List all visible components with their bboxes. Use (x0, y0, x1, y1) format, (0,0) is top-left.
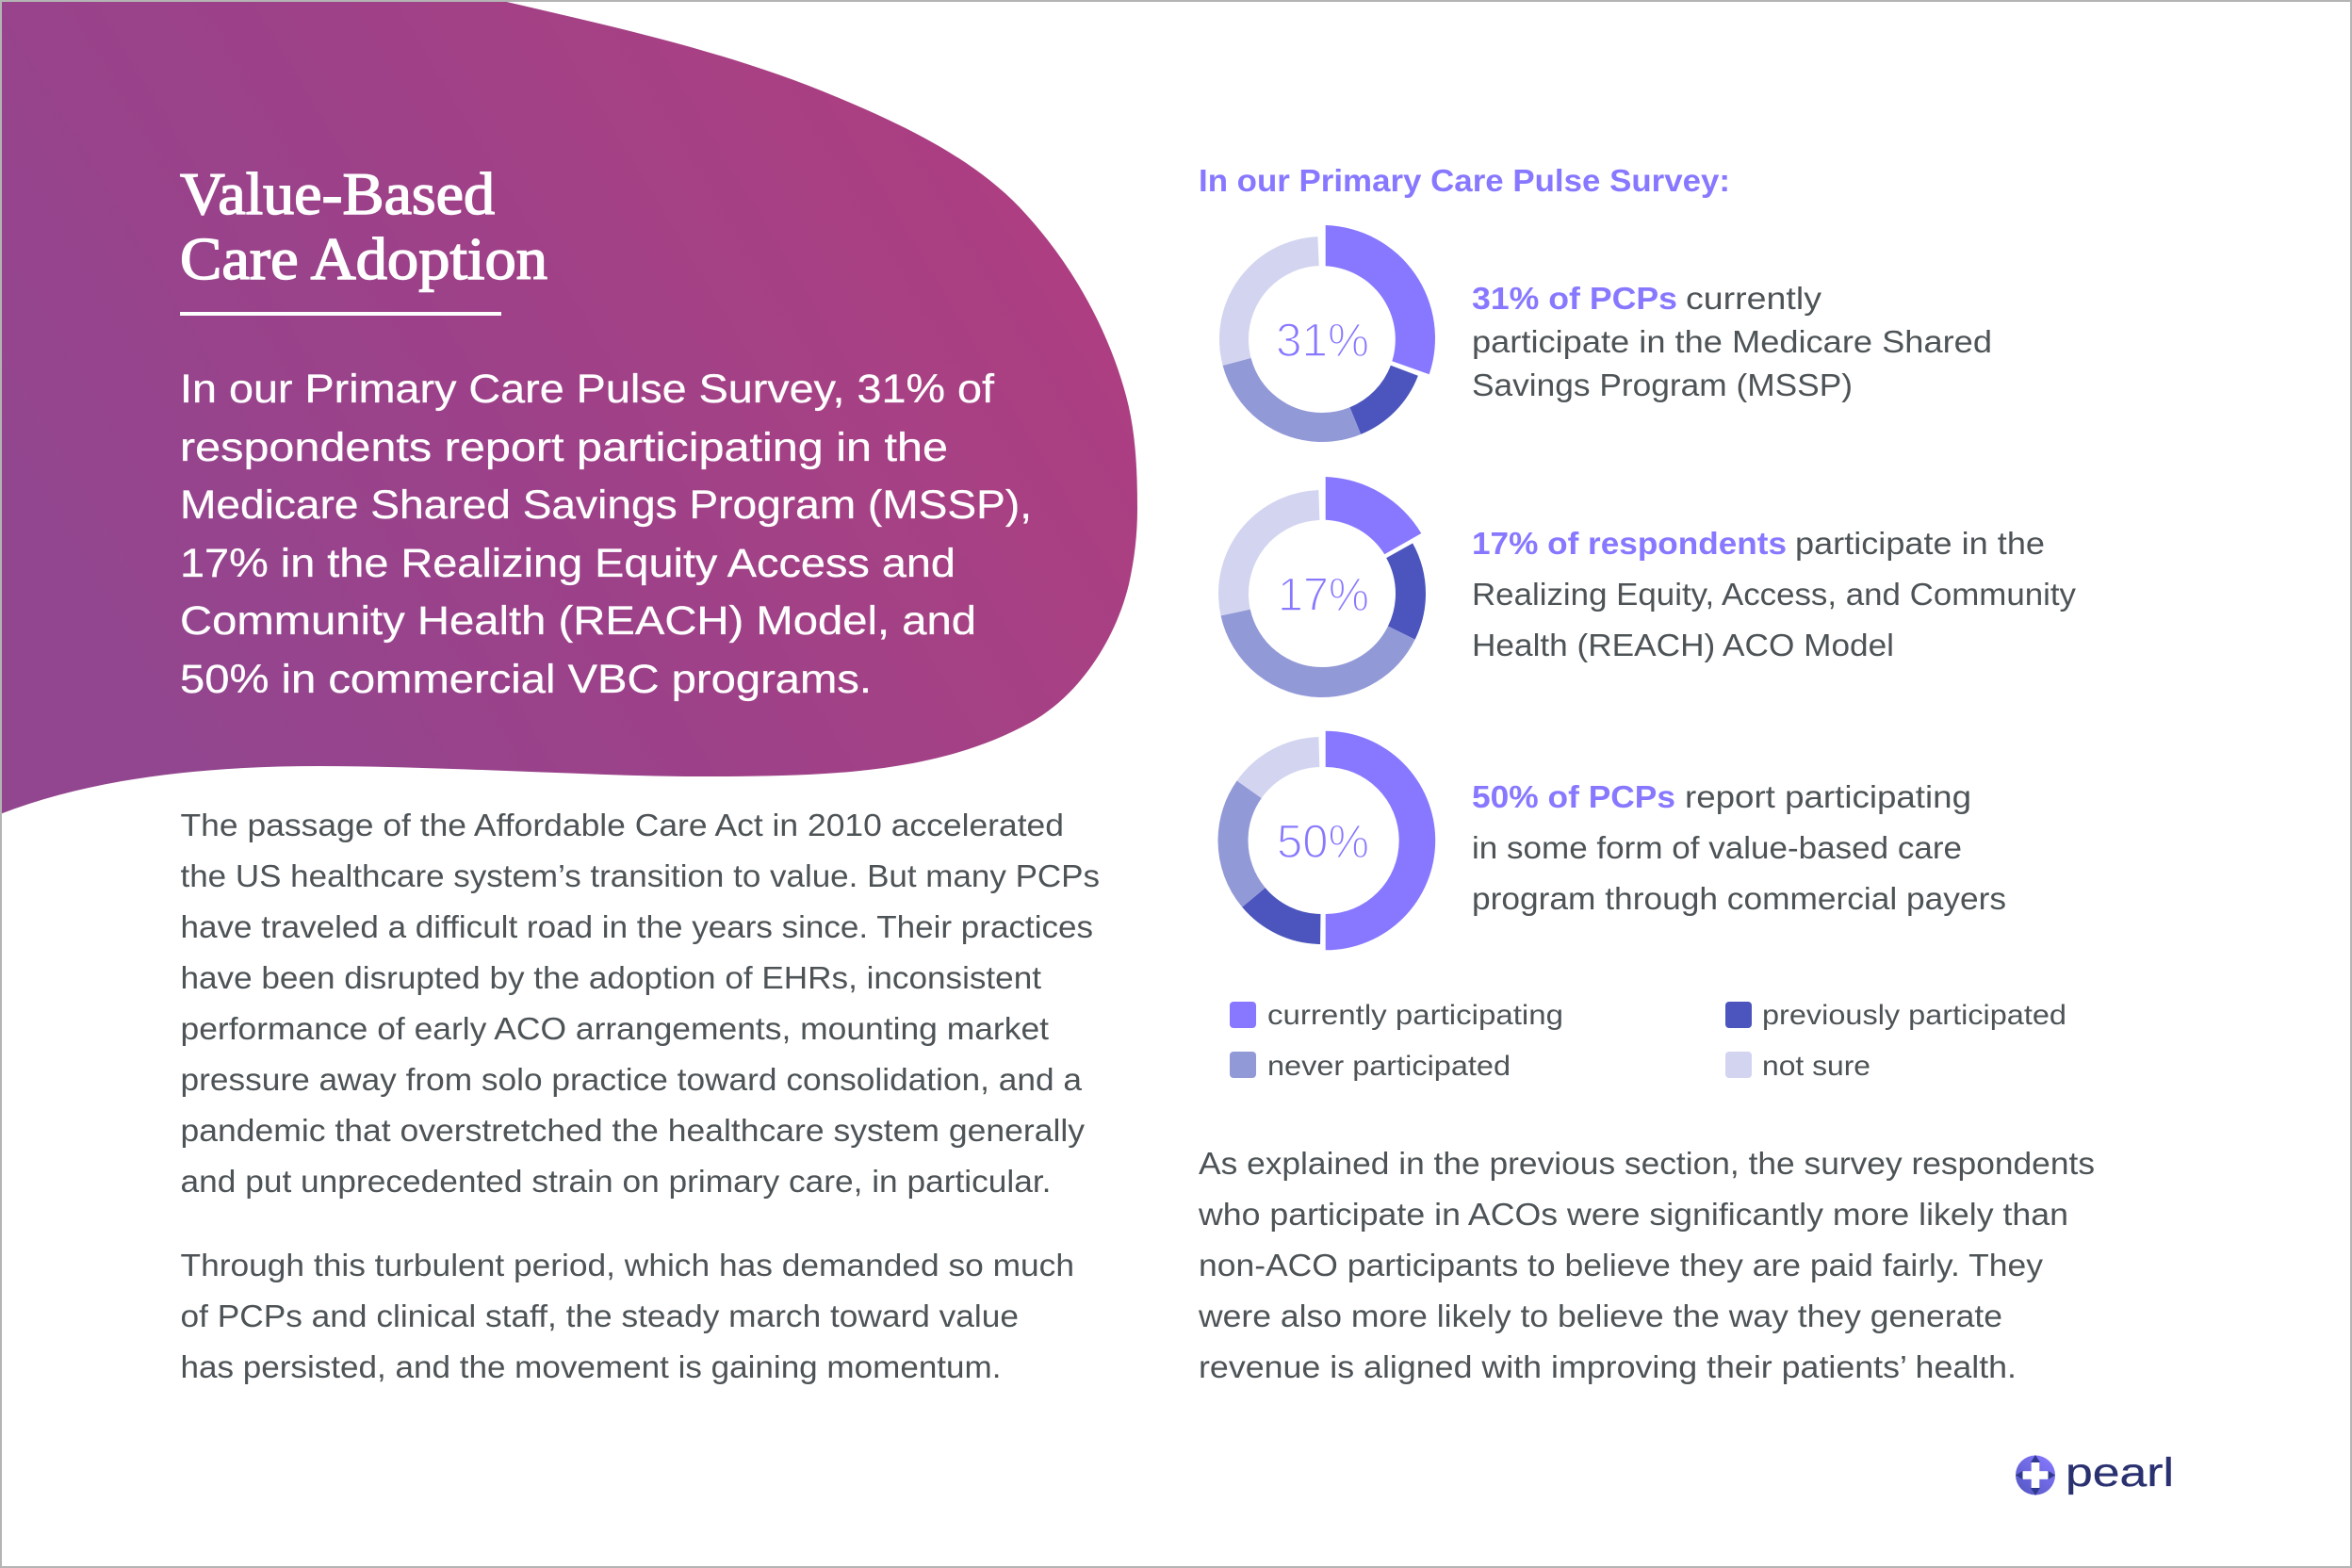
donut 1 description: Savings Program (MSSP) (1472, 368, 1853, 403)
body text: paragraph 1: pandemic that overstretched the healthcare system generally (181, 1114, 1085, 1149)
donut 2 description: Realizing Equity, Access, and Community (1472, 578, 2076, 612)
donut chart: 17% (1233, 477, 1421, 682)
body text: paragraph 1: have traveled a difficult road in the years since. Their practices (181, 910, 1093, 945)
donut chart: 17%: 17% (1278, 568, 1369, 621)
body text: paragraph 2: has persisted, and the movement is gaining momentum. (181, 1350, 1001, 1385)
legend: currently participating (1267, 1000, 1563, 1031)
icon: pearl cross (2016, 1455, 2055, 1495)
callout text (180, 367, 1032, 702)
donut 1 description: currently (1686, 282, 1821, 317)
callout text: 50% in commercial VBC programs. (180, 657, 872, 702)
body text: right paragraph: who participate in ACOs were significantly more likely than (1198, 1198, 2068, 1233)
donut 2 description (1472, 527, 2076, 663)
donut chart: 50% (1233, 731, 1435, 950)
legend (1230, 1000, 2066, 1082)
callout text: Community Health (REACH) Model, and (180, 598, 976, 644)
body text: paragraph 1: the US healthcare system’s transition to value. But many PCPs (181, 859, 1100, 894)
logo: pearl: pearl (2066, 1450, 2174, 1495)
donut 3 description (1472, 780, 2006, 917)
donut 1 description: 31% of PCPs (1472, 282, 1677, 317)
body text: paragraph 1: The passage of the Affordable Care Act in 2010 accelerated (181, 808, 1064, 843)
body text: paragraph 2: Through this turbulent period, which has demanded so much (181, 1249, 1074, 1283)
donut chart: 50%: 50% (1277, 815, 1369, 868)
body text: right paragraph: revenue is aligned with improving their patients’ health. (1199, 1350, 2017, 1385)
title: Care Adoption (180, 226, 547, 292)
legend: never participated (1267, 1051, 1511, 1082)
donut chart: 31% (1234, 225, 1435, 428)
callout text: respondents report participating in the (180, 425, 948, 470)
callout text: 17% in the Realizing Equity Access and (180, 541, 956, 586)
body text: paragraph 2 (181, 1249, 1074, 1385)
survey heading: In our Primary Care Pulse Survey: (1199, 164, 1730, 199)
logo: pearl (2016, 1450, 2174, 1495)
body text: paragraph 1: and put unprecedented strain on primary care, in particular. (181, 1165, 1052, 1200)
legend: previously participated (1762, 1000, 2066, 1031)
body text: right paragraph (1198, 1147, 2095, 1385)
body text: paragraph 1: pressure away from solo practice toward consolidation, and a (181, 1063, 1082, 1098)
body text: paragraph 1: have been disrupted by the adoption of EHRs, inconsistent (181, 961, 1042, 996)
body text: right paragraph: As explained in the previous section, the survey respondents (1199, 1147, 2095, 1182)
title underline (180, 312, 501, 316)
donut 3 description: program through commercial payers (1472, 882, 2006, 917)
title: Value-Based (180, 161, 495, 227)
donut 2 description: Health (REACH) ACO Model (1472, 629, 1894, 663)
donut chart: 31%: 31% (1276, 314, 1369, 367)
title (180, 161, 547, 292)
donut 3 description: 50% of PCPs (1472, 780, 1675, 815)
donut 3 description: in some form of value-based care (1472, 831, 1962, 866)
body text: paragraph 2: of PCPs and clinical staff, the steady march toward value (181, 1299, 1019, 1334)
panel: gradient header blob (0, 0, 1137, 814)
body text: paragraph 1 (181, 808, 1100, 1200)
body text: right paragraph: were also more likely to believe the way they generate (1198, 1299, 2002, 1334)
body text: right paragraph: non-ACO participants to believe they are paid fairly. They (1199, 1249, 2043, 1283)
donut 2 description: participate in the (1795, 527, 2045, 562)
donut 2 description: 17% of respondents (1472, 527, 1787, 562)
callout text: In our Primary Care Pulse Survey, 31% of (180, 367, 995, 412)
donut 3 description: report participating (1685, 780, 1971, 815)
donut 1 description (1472, 282, 1992, 403)
donut 1 description: participate in the Medicare Shared (1472, 325, 1992, 360)
callout text: Medicare Shared Savings Program (MSSP), (180, 482, 1032, 528)
legend: not sure (1762, 1051, 1870, 1082)
body text: paragraph 1: performance of early ACO arrangements, mounting market (181, 1012, 1050, 1047)
